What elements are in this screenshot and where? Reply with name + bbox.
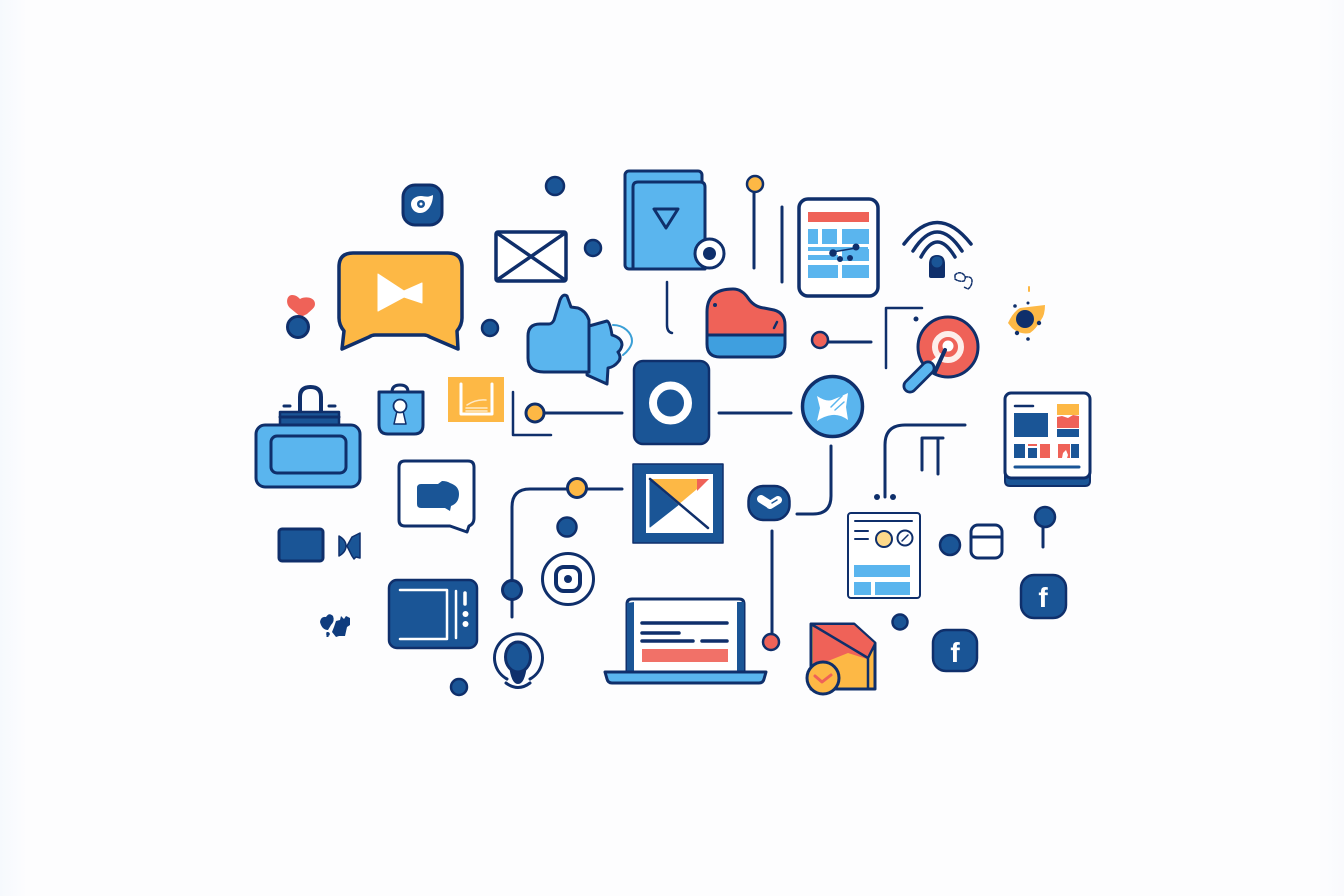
- connector: vertical line: [780, 207, 784, 282]
- icon: blue suitcase bag: [256, 387, 360, 487]
- icon: mail image tile: [633, 464, 723, 543]
- icon: scattered blobs: [320, 614, 350, 637]
- dot: [482, 320, 498, 336]
- icon: social f tile right: [1021, 575, 1066, 618]
- icon: document with music notes: [799, 199, 878, 296]
- connector: navy pin: [1035, 507, 1055, 547]
- connector: corner line: [513, 392, 551, 435]
- icon: red grand piano shape: [707, 289, 785, 357]
- connector: red node line: [812, 332, 871, 348]
- connector: red pin: [763, 531, 779, 650]
- dot: [546, 177, 564, 195]
- icon: small video tile: [279, 529, 360, 561]
- icon: amber speech bubble: [339, 253, 462, 349]
- dot: [940, 535, 960, 555]
- connector: bracket line: [886, 308, 922, 368]
- icon: small app badge: [403, 185, 442, 225]
- connector: curved line to form card: [874, 425, 965, 500]
- icon: blue folder book: [625, 171, 724, 269]
- icon: tablet player: [389, 580, 477, 648]
- icon: news dashboard tablet: [1005, 393, 1090, 486]
- icon: central hub tile: [634, 361, 709, 444]
- dot: [892, 614, 908, 630]
- icon: envelope: [496, 232, 566, 281]
- icon: magnifier target: [910, 317, 978, 386]
- icon: padlock outline: [971, 525, 1002, 558]
- dot: [585, 240, 601, 256]
- icon: keyhole padlock bag: [379, 385, 423, 434]
- dot: [558, 518, 576, 536]
- icon: social f tile right: f: [1038, 582, 1048, 613]
- connector: amber node line: [526, 404, 622, 422]
- icon: speech outline bubble: [399, 461, 474, 532]
- icon: thumbs up: [528, 295, 632, 384]
- icon: circular ribbon badge: [802, 376, 862, 436]
- icon: social f tile lower: f: [950, 637, 960, 668]
- icon: link tag badge: [748, 486, 790, 520]
- icon: microphone: [495, 634, 543, 688]
- connector: gate line: [922, 438, 943, 474]
- icon: heart with dot: [287, 295, 315, 338]
- connector: hub to circle: [719, 412, 791, 414]
- icon: red amber envelope with check: [807, 624, 875, 694]
- icon: camera ring: [542, 554, 594, 604]
- connector: amber node elbow: [502, 478, 622, 617]
- icon: amber spark eye: [1008, 287, 1045, 341]
- icon: social f tile lower: [933, 630, 977, 671]
- icon: wifi signal: [904, 222, 972, 289]
- icon: form card: [848, 513, 920, 598]
- dot: [451, 679, 467, 695]
- connector: hooked line: [667, 282, 672, 333]
- icon: amber chart tile: [448, 377, 504, 422]
- connector: amber pin: [747, 176, 763, 268]
- icon: laptop: [605, 599, 766, 683]
- connector: curved circle to tag: [797, 446, 831, 514]
